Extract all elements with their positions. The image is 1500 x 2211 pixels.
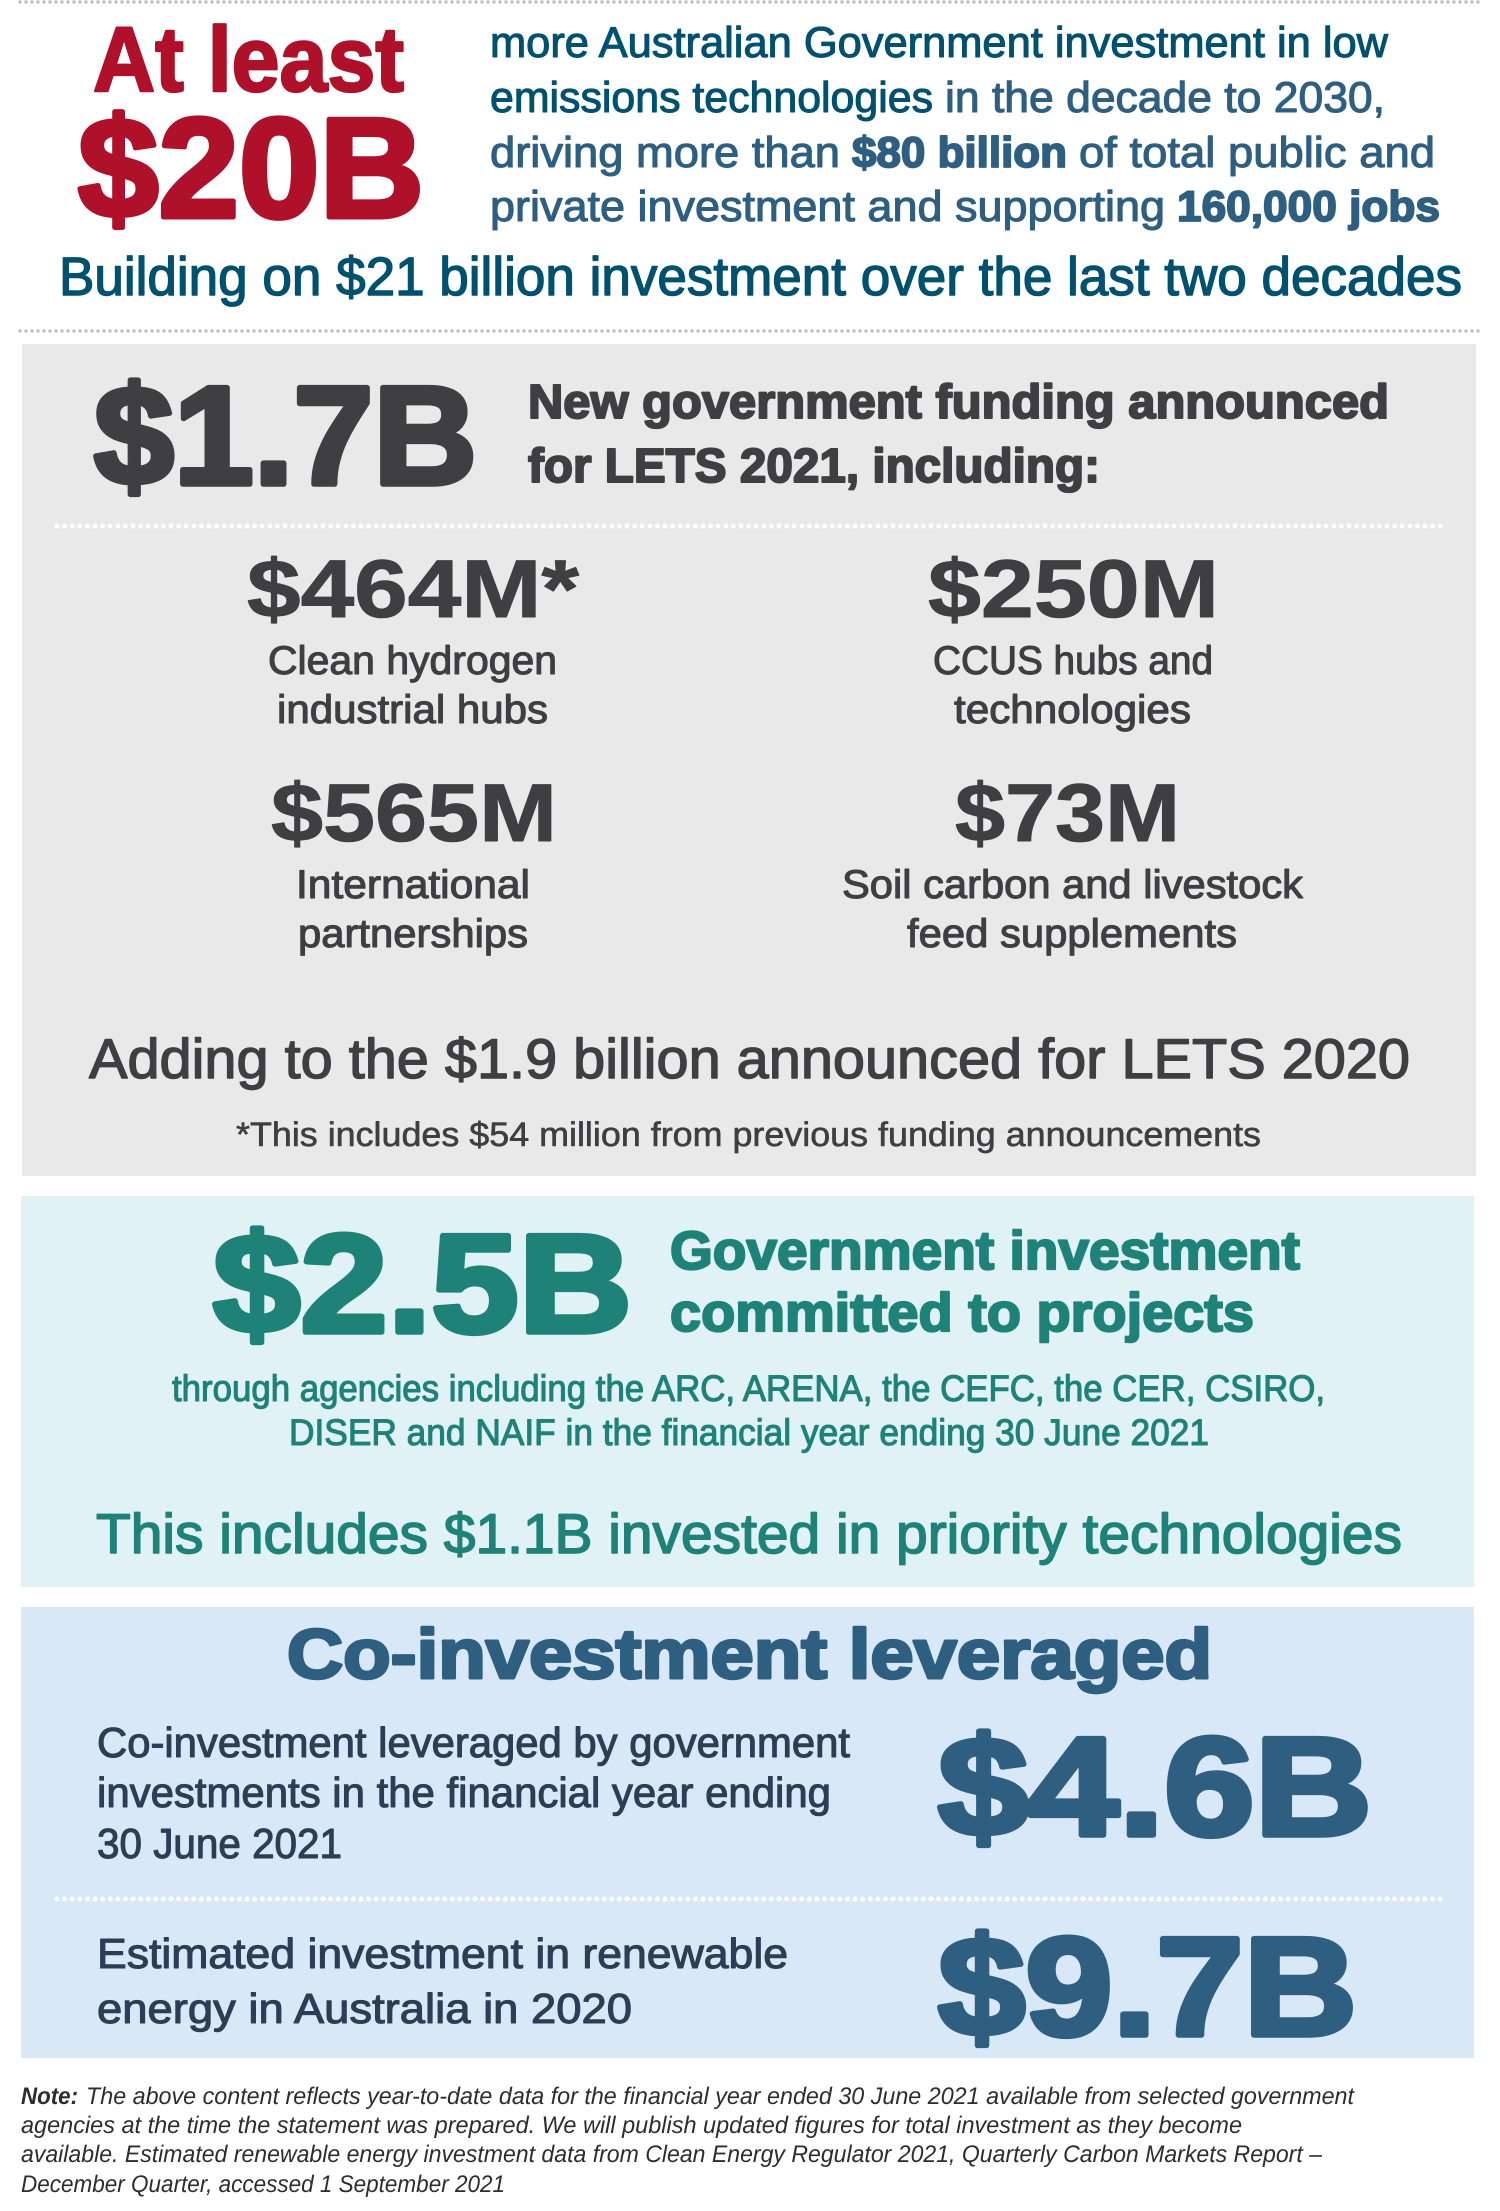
panel: new government funding [22,344,1476,1176]
panel heading [528,376,1389,493]
intro text block: in the decade to 2030, [945,74,1385,122]
panel: government investment committed [21,1196,1474,1587]
item: international partnerships: International [296,863,530,907]
description: renewable energy: energy in Australia in 2020 [97,1985,632,2032]
intro text block: 160,000 jobs [1177,183,1440,231]
agencies text: DISER and NAIF in the financial year ending 30 June 2021 [289,1412,1209,1453]
item: clean hydrogen: $464M* [247,544,579,635]
statement: adding to $1.9 billion: Adding to the $1.9 billion announced for LETS 2020 [89,1027,1410,1090]
item: international partnerships: partnerships [298,912,528,956]
subheading: building on $21 billion: Building on $21 billion investment over the last two decades [59,247,1462,307]
panel title: Co-investment leveraged [287,1615,1212,1693]
item: soil carbon: Soil carbon and livestock [842,863,1304,907]
item: soil carbon [842,768,1304,956]
item: clean hydrogen: industrial hubs [277,688,548,732]
panel heading: Government investment [670,1221,1300,1281]
agencies text [172,1368,1325,1453]
description: co-investment [97,1719,850,1867]
item: clean hydrogen: Clean hydrogen [268,639,557,683]
intro text block: $80 billion [852,129,1067,177]
item: CCUS hubs: CCUS hubs and [933,639,1213,683]
panel heading: committed to projects [670,1283,1254,1343]
item: soil carbon: $73M [955,768,1180,859]
note: agencies at the time the statement was prepared. We will publish updated figures for total investment as they become [21,2112,1242,2139]
note: December Quarter, accessed 1 September 2021 [21,2171,505,2198]
big number: $2.5B: $2.5B [213,1205,632,1362]
description: co-investment: Co-investment leveraged by government [97,1719,850,1766]
header: at least $20B [59,9,1462,307]
item: international partnerships: $565M [271,768,557,859]
item: soil carbon: feed supplements [907,912,1237,956]
panel heading [670,1221,1300,1343]
note: The above content reflects year-to-date data for the financial year ended 30 June 2021 available from selected government [86,2083,1355,2110]
item: CCUS hubs: technologies [954,688,1191,732]
item: CCUS hubs [928,544,1219,732]
footnote: $54 million: *This includes $54 million from previous funding announcements [236,1116,1261,1154]
big number: $4.6B: $4.6B [938,1708,1372,1865]
description: renewable energy [97,1930,788,2032]
item: CCUS hubs: $250M [928,544,1219,635]
intro text block: private investment and supporting [490,183,1165,231]
panel heading: New government funding announced [528,376,1389,429]
statement: $1.1B priority technologies: This includes $1.1B invested in priority technologies [96,1502,1402,1565]
description: co-investment: investments in the financial year ending [97,1769,831,1816]
item: international partnerships [271,768,557,956]
intro text block: more Australian Government investment in low [490,19,1389,67]
item: clean hydrogen [247,544,579,732]
intro text block: of total public and [1079,129,1435,177]
note: available. Estimated renewable energy investment data from Clean Energy Regulator 2021, Quarterly Carbon Markets Report – [21,2141,1323,2168]
agencies text: through agencies including the ARC, ARENA, the CEFC, the CER, CSIRO, [172,1368,1325,1409]
big number: $20B: $20B [78,89,424,248]
big number: $9.7B: $9.7B [938,1908,1357,2065]
panel heading: for LETS 2021, including: [528,440,1100,493]
note: Note: [21,2083,78,2110]
big number: $1.7B: $1.7B [94,357,477,514]
intro text block [490,19,1440,231]
intro text block: driving more than [490,129,840,177]
headline: At least: At least [93,9,404,111]
description: co-investment: 30 June 2021 [97,1820,342,1867]
panel: co-investment leveraged [21,1607,1474,2065]
note [21,2083,1355,2198]
description: renewable energy: Estimated investment in renewable [97,1930,788,1977]
intro text block: emissions technologies [490,74,933,122]
